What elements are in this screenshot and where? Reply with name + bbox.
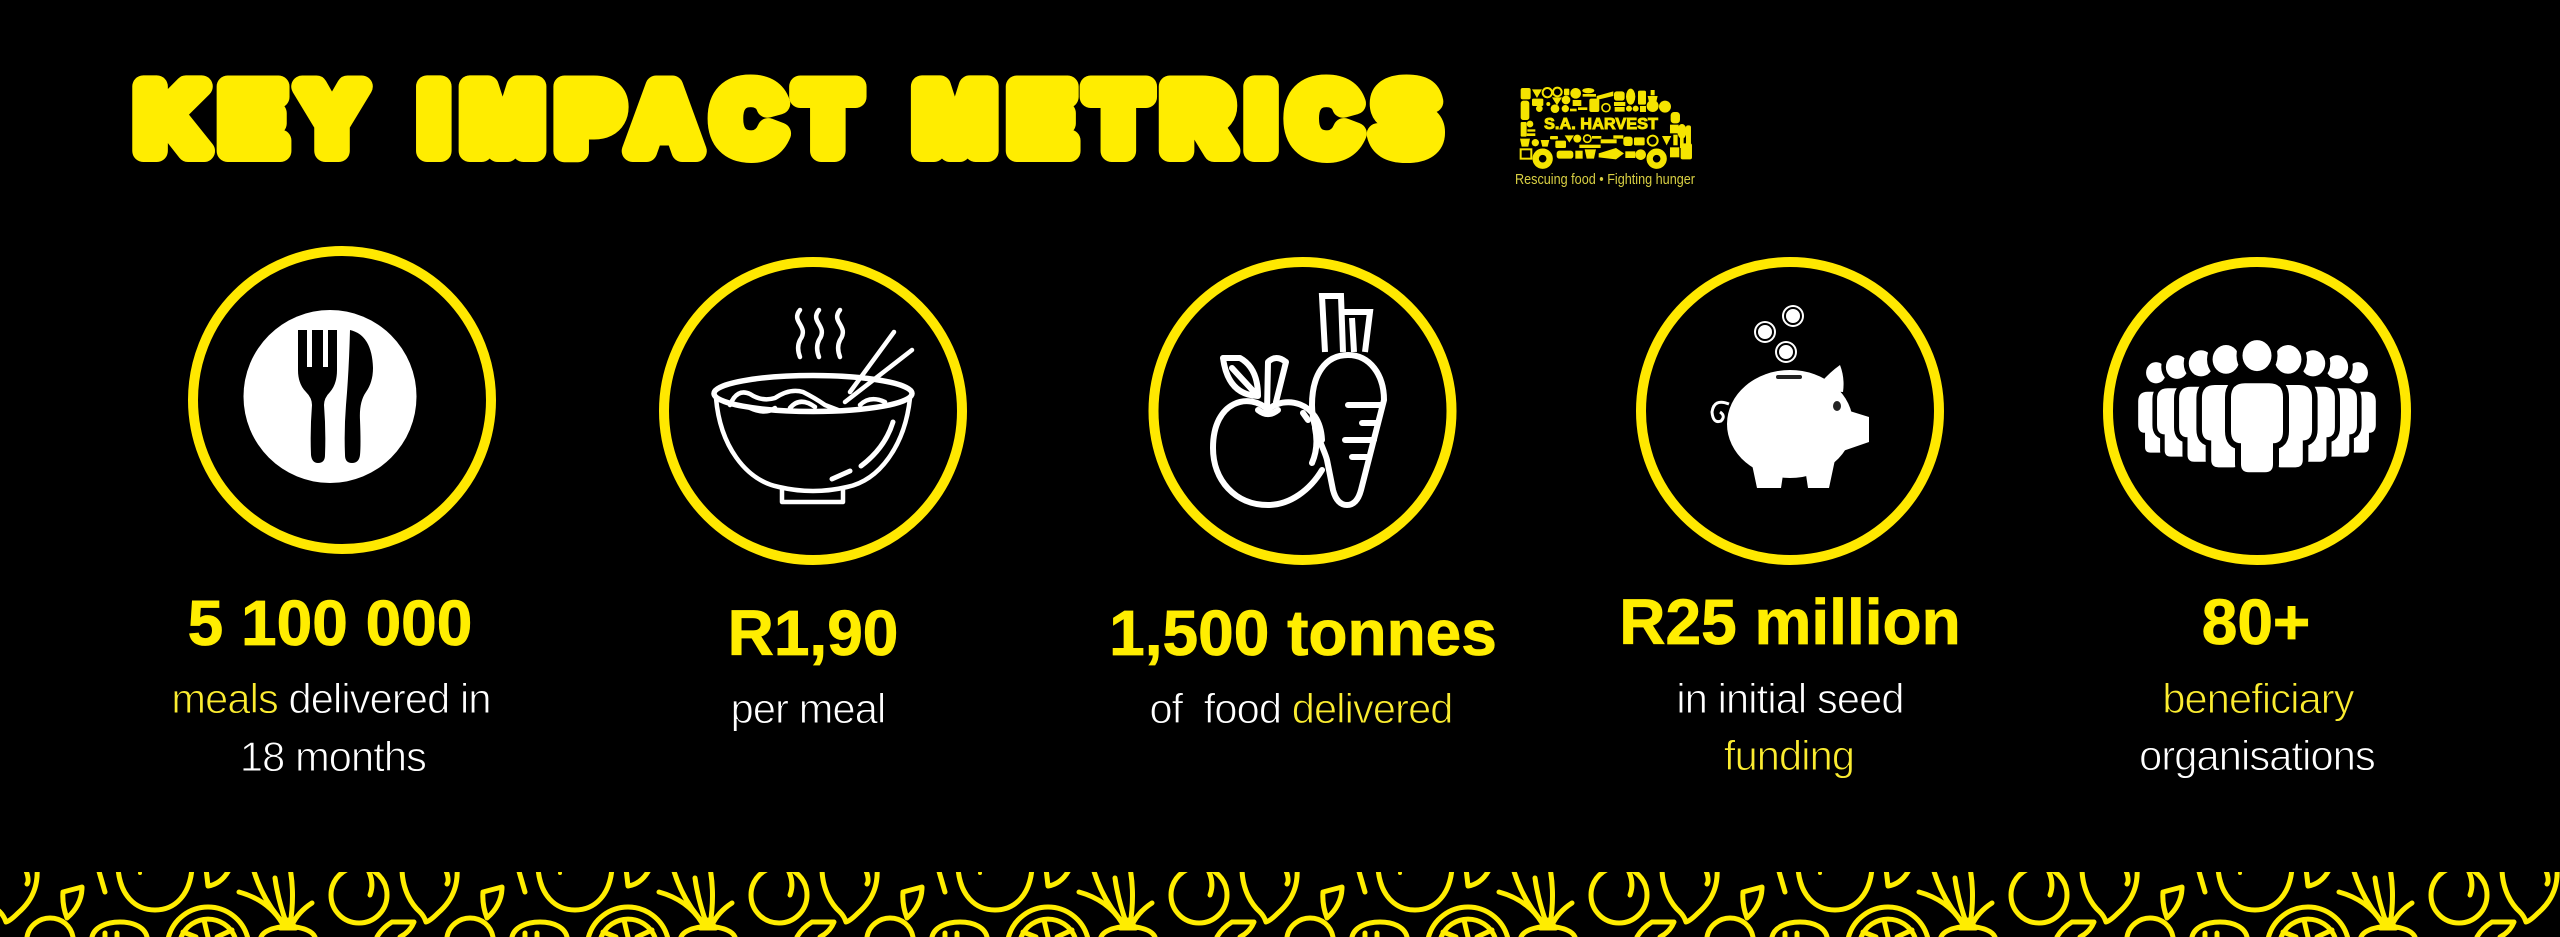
icon: fork and knife on plate	[244, 310, 416, 483]
description: meals delivered in	[171, 675, 491, 722]
description: of food delivered	[1149, 685, 1453, 732]
icon: noodle bowl	[714, 310, 912, 502]
metric: meals delivered	[171, 251, 491, 780]
logo: S.A. Harvest truck	[1515, 88, 1695, 188]
metric: cost per meal	[664, 262, 962, 732]
icon ring	[1154, 262, 1452, 560]
icon ring	[664, 262, 962, 560]
icon: piggy bank with coins	[1712, 305, 1869, 488]
metric: beneficiary organisations	[2108, 262, 2406, 779]
icon: food truck built of food shapes	[1520, 88, 1692, 166]
number: 5 100 000	[188, 587, 472, 659]
icon ring	[1641, 262, 1939, 560]
metric: tonnes of food	[1109, 262, 1497, 732]
logo wordmark: S.A. HARVEST	[1544, 116, 1658, 133]
title: KEY IMPACT METRICS	[137, 66, 1454, 171]
footer pattern: fruit and vegetable line art	[0, 867, 2557, 937]
number: R1,90	[728, 597, 898, 669]
icon ring	[193, 251, 491, 549]
number: 80+	[2202, 586, 2310, 658]
icon: apple and carrot	[1213, 296, 1384, 505]
icon: crowd of people	[2138, 340, 2376, 472]
logo tagline: Rescuing food • Fighting hunger	[1515, 171, 1695, 188]
description: in initial seed	[1676, 675, 1904, 722]
description line 2: 18 months	[240, 733, 426, 780]
number: R25 million	[1619, 586, 1961, 658]
description: beneficiary	[2162, 675, 2355, 722]
description: per meal	[731, 685, 885, 732]
description line 2: funding	[1724, 732, 1854, 779]
icon ring	[2108, 262, 2406, 560]
description line 2: organisations	[2139, 732, 2375, 779]
metric: seed funding	[1619, 262, 1961, 779]
number: 1,500 tonnes	[1109, 597, 1497, 669]
